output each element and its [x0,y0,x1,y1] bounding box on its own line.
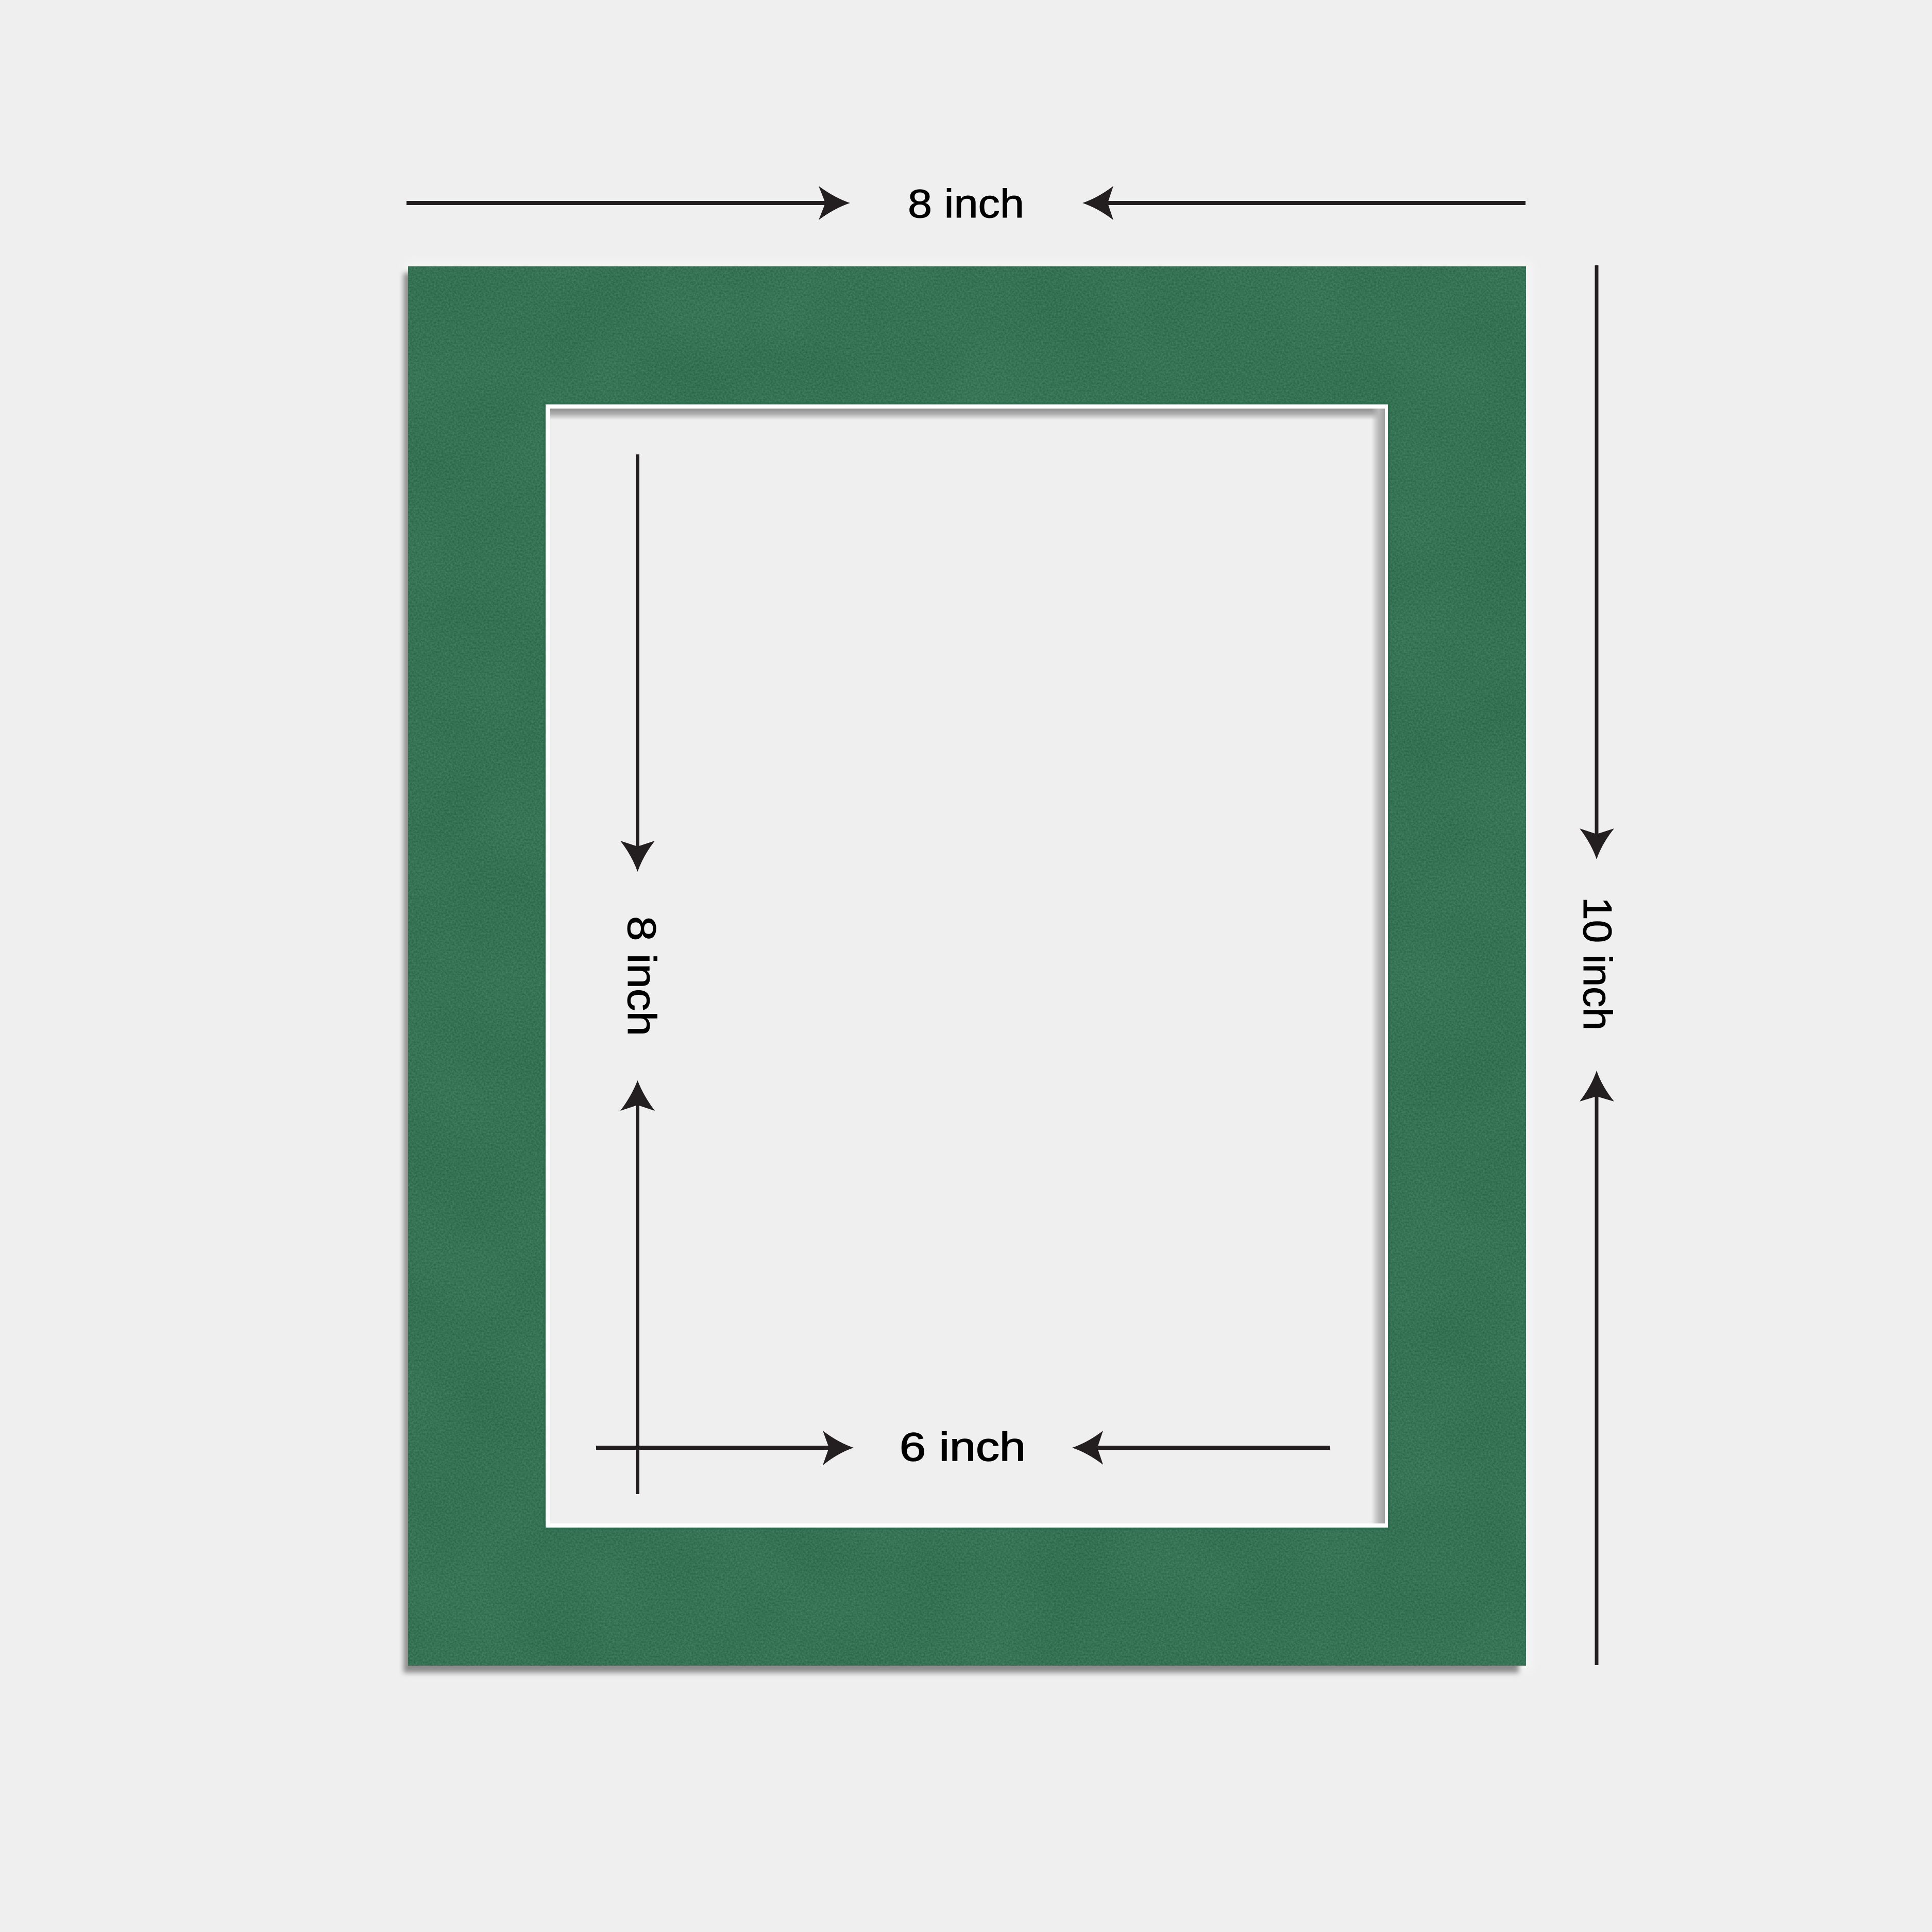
arrow: inner left, pointing up [620,1080,655,1494]
panel: green photo mat with window [403,261,1533,1673]
inner shadow: right [1371,409,1385,1523]
mat drop shadow [403,273,1519,1673]
arrow: inner left, pointing down [620,454,655,872]
inner shadow: top [550,409,1385,420]
arrow: right side, pointing down [1580,265,1614,859]
window opening [546,404,1388,1528]
label: bottom 6 inch: 6 inch [900,1424,1026,1469]
mat halo [404,261,1533,1671]
arrow: bottom right, pointing left [1072,1431,1330,1465]
window cut edge [544,402,1390,1530]
label: top 8 inch: 8 inch [908,181,1024,226]
white bevel [546,404,1388,1528]
arrow: right side, pointing up [1580,1071,1614,1665]
label: inner 8 inch: 8 inch [619,916,665,1036]
mat board [408,266,1526,1666]
arrow: top right, pointing left [1082,186,1526,220]
arrow: top left, pointing right [406,186,850,220]
arrow: bottom left, pointing right [596,1431,854,1465]
label: right 10 inch: 10 inch [1575,897,1620,1030]
